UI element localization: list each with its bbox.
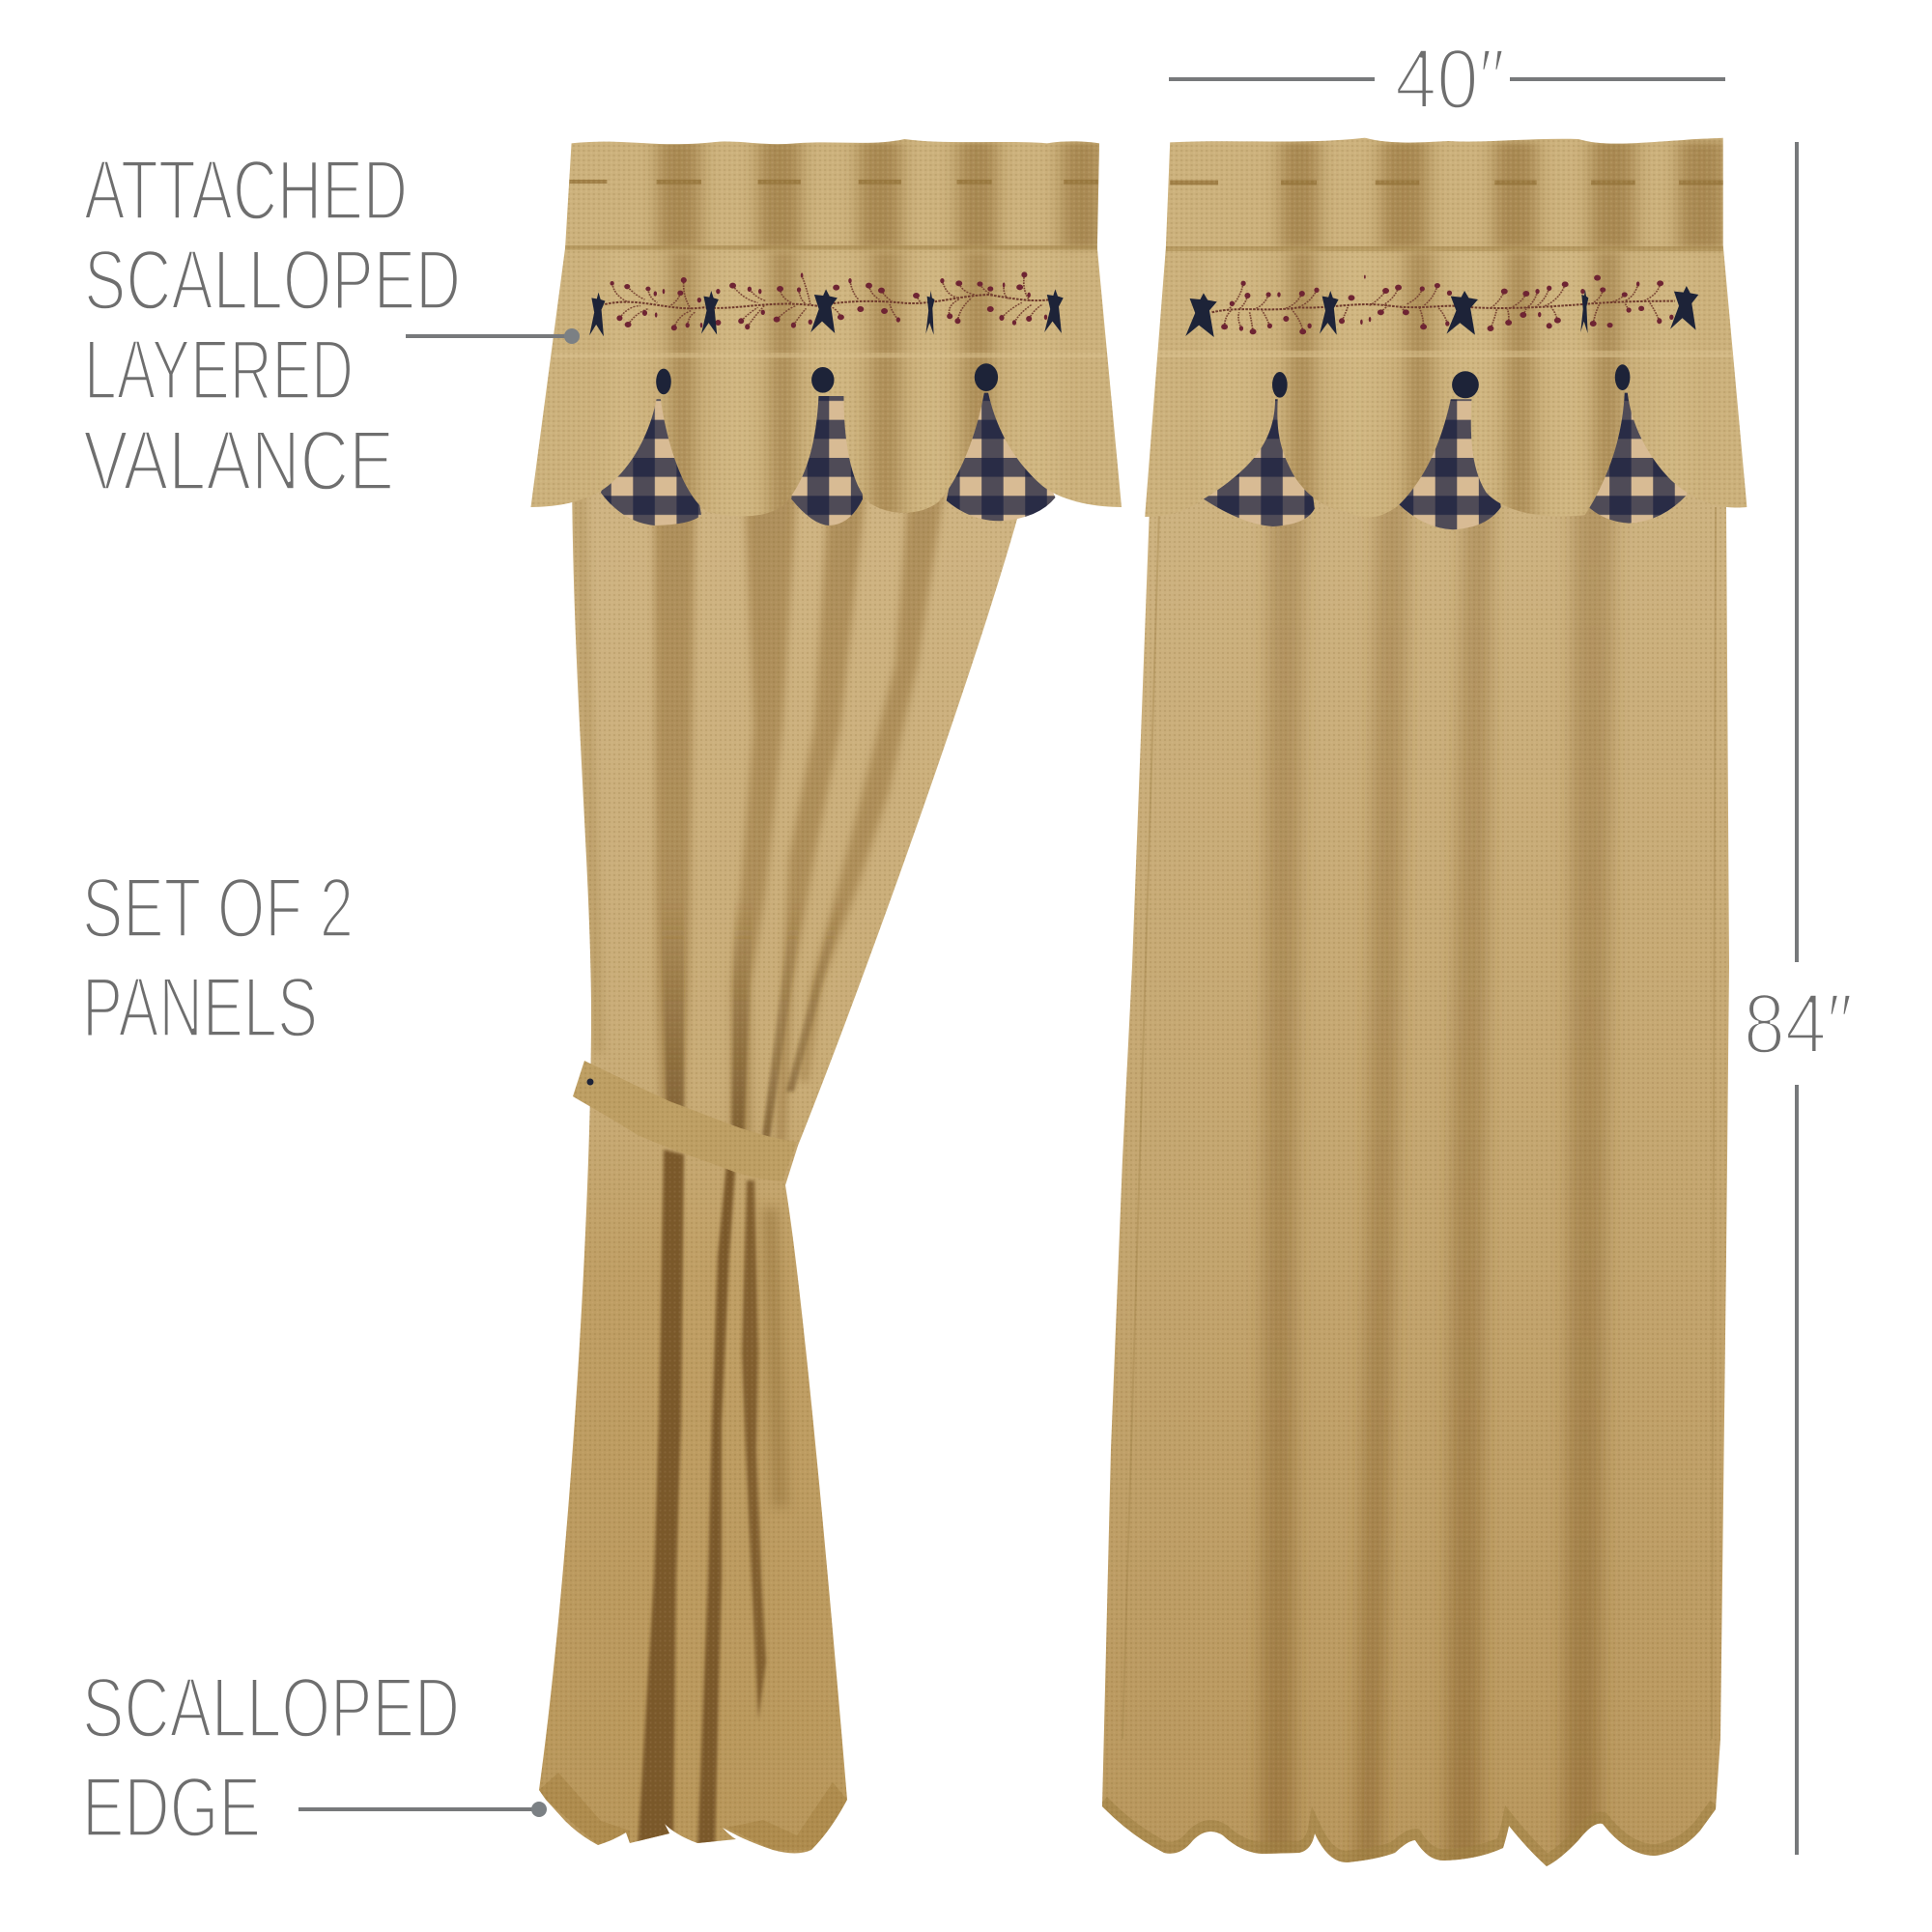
dimension: height 84 inches: 84″	[1744, 976, 1853, 1071]
navy stars	[1185, 286, 1698, 337]
heading: scalloped edge	[82, 1660, 460, 1855]
heading: attached scalloped layered valance: ATTACHED	[84, 142, 408, 238]
embroidered berry vine	[605, 271, 1051, 330]
heading: scalloped edge: EDGE	[82, 1759, 261, 1855]
valance: left panel	[519, 132, 1131, 526]
callout: valance leader line and dot	[406, 328, 580, 344]
heading: scalloped edge: SCALLOPED	[82, 1660, 460, 1755]
dimension: height 84 inches	[1744, 142, 1853, 1855]
heading: attached scalloped layered valance: SCALLOPED	[84, 232, 461, 327]
heading: attached scalloped layered valance	[83, 142, 461, 508]
heading: set of 2 panels: PANELS	[82, 959, 318, 1055]
heading: set of 2 panels: SET OF 2	[82, 860, 354, 955]
heading: set of 2 panels	[82, 860, 354, 1055]
heading: attached scalloped layered valance: VALANCE	[83, 412, 394, 508]
valance: right panel	[1139, 132, 1754, 529]
right panel fabric body	[1092, 444, 1739, 1884]
left panel fabric body	[539, 488, 1017, 1853]
heading: attached scalloped layered valance: LAYERED	[84, 322, 354, 417]
dimension: width 40 inches: 40″	[1395, 31, 1505, 127]
scalloped valance fabric	[1139, 132, 1754, 525]
gingham tabs	[601, 374, 1055, 526]
gingham tabs	[1204, 374, 1688, 529]
dimension: width 40 inches	[1169, 31, 1725, 127]
navy stars	[589, 289, 1064, 336]
curtain panel: left, tied back	[539, 488, 1017, 1853]
scalloped valance fabric	[519, 132, 1131, 525]
curtain panel: right, hanging straight	[1092, 444, 1739, 1884]
callout: scalloped edge leader line and dot	[298, 1802, 547, 1817]
tieback strap with button	[573, 1061, 797, 1181]
embroidered berry vine	[1212, 275, 1675, 334]
navy buttons	[656, 363, 998, 394]
navy buttons	[1272, 364, 1630, 398]
